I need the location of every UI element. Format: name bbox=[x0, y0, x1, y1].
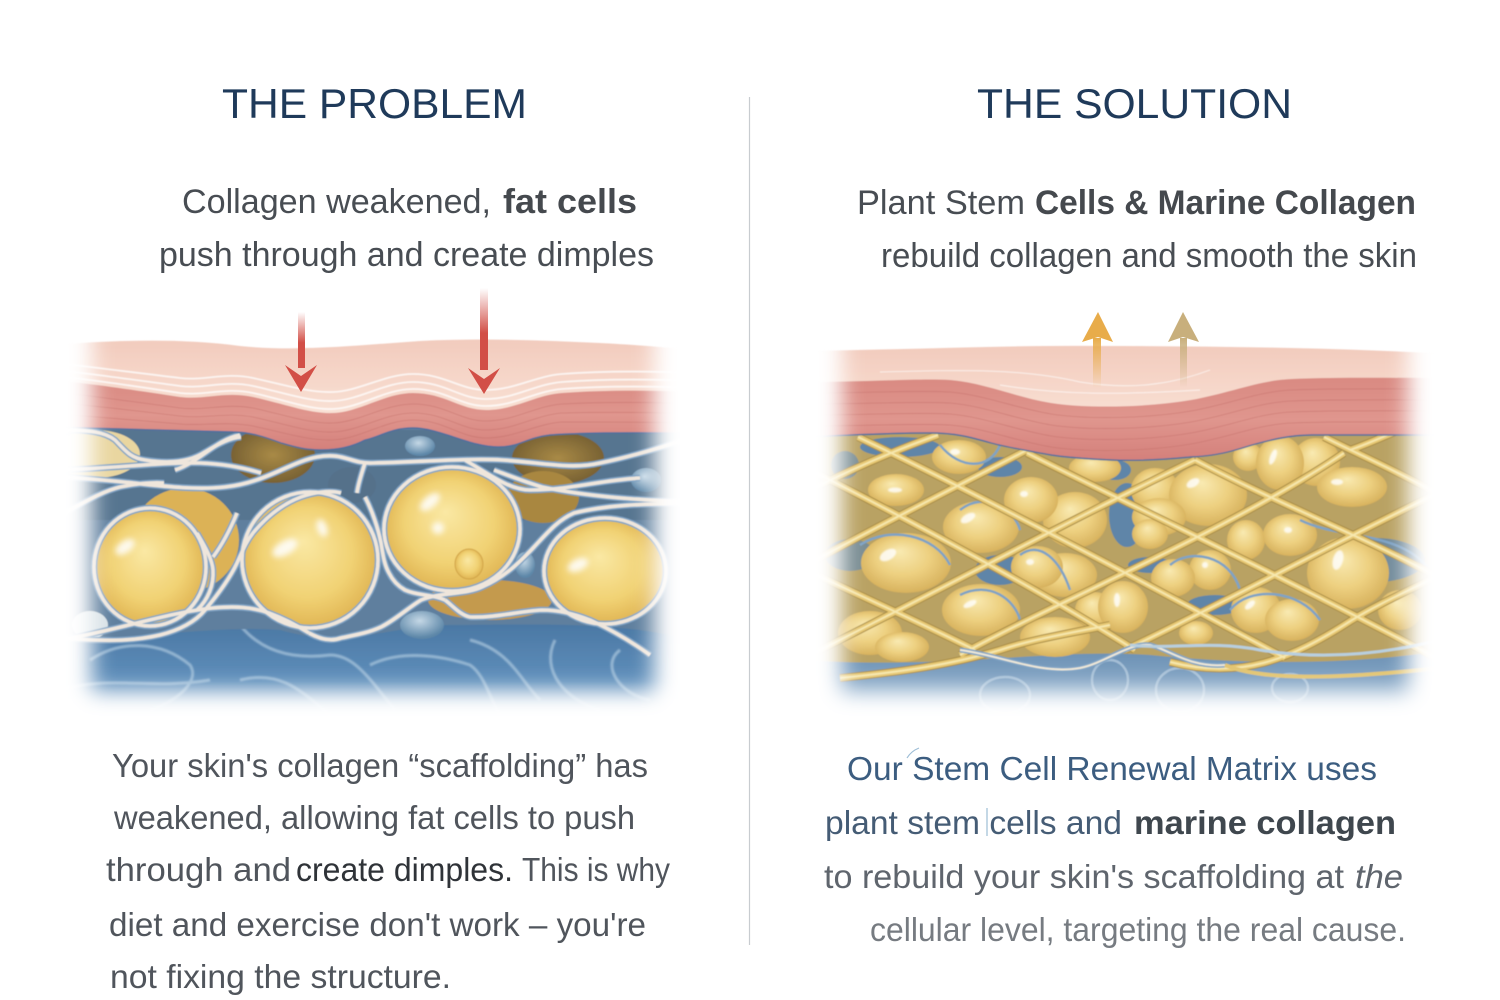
body text: problem bbox=[106, 747, 670, 995]
fat cell highlights bbox=[113, 490, 591, 575]
subheading: solution bbox=[857, 184, 1417, 275]
body text: problem: This is why bbox=[522, 851, 670, 888]
subheading: solution: Cells & Marine Collagen bbox=[1035, 184, 1416, 222]
connective tissue ripples bbox=[84, 628, 641, 698]
skin: dermis bbox=[800, 378, 1450, 460]
background fat cells bbox=[52, 427, 661, 639]
skin: dermis striations bbox=[852, 388, 1402, 440]
body text: problem: create dimples. bbox=[296, 851, 513, 888]
divider bbox=[748, 97, 750, 945]
body text: problem: not fixing the structure. bbox=[110, 958, 451, 995]
subheading: solution: rebuild collagen and smooth the skin bbox=[881, 237, 1417, 275]
body text: problem: diet and exercise don't work – you're bbox=[109, 906, 646, 943]
subheading: problem bbox=[159, 183, 654, 274]
lower wavy fibres bbox=[960, 640, 1440, 677]
body text: problem: weakened, allowing fat cells to push bbox=[113, 799, 635, 836]
fibre network bbox=[60, 430, 690, 655]
fat cell 1 bbox=[95, 509, 205, 625]
dermis boundary bbox=[800, 433, 1450, 460]
text artifact ticks bbox=[907, 748, 987, 836]
heading: the solution: THE SOLUTION bbox=[977, 80, 1292, 127]
fat cell 4 bbox=[545, 519, 665, 623]
skin: epidermis wave lines bbox=[84, 366, 662, 410]
connective tissue swirls bbox=[979, 658, 1310, 698]
fat cell 2 bbox=[243, 493, 377, 627]
body text: solution: plant stem cells and bbox=[825, 804, 1122, 841]
skin: upper epidermis bbox=[80, 339, 666, 414]
arrow: lift two bbox=[1168, 312, 1199, 388]
body text: solution: cellular level, targeting the real cause. bbox=[870, 911, 1406, 948]
fat bed bbox=[800, 430, 1450, 663]
dermis boundary bbox=[50, 427, 700, 450]
blue gaps bbox=[825, 437, 1425, 615]
arrow: lift one bbox=[1082, 312, 1113, 388]
body text: solution bbox=[824, 750, 1406, 948]
body text: solution: to rebuild your skin's scaffolding at bbox=[824, 858, 1344, 895]
arrow: pressure one bbox=[285, 312, 317, 392]
gold collagen lattice bbox=[810, 432, 1440, 678]
body text: solution: Our Stem Cell Renewal Matrix uses bbox=[847, 750, 1377, 787]
body text: problem: through and bbox=[106, 851, 291, 888]
subheading: solution: Plant Stem bbox=[857, 184, 1025, 222]
illustration: weakened skin cross-section bbox=[75, 339, 671, 707]
skin: epidermis bbox=[830, 345, 1420, 407]
illustration: rebuilt skin cross-section bbox=[825, 345, 1425, 706]
fat cell highlights bbox=[878, 448, 1345, 611]
arrow: pressure two bbox=[468, 288, 500, 394]
skin: dermis striations bbox=[101, 398, 646, 438]
dark interstitial layer bbox=[60, 425, 690, 640]
fat cell 3 bbox=[385, 468, 519, 590]
blue membranes bbox=[860, 445, 1430, 620]
subheading: problem: Collagen weakened, bbox=[182, 183, 491, 221]
small fat droplet bbox=[455, 549, 483, 579]
blue deep tissue bbox=[826, 652, 1424, 706]
body text: problem: Your skin's collagen “scaffolding” has bbox=[112, 747, 648, 784]
body text: solution: the bbox=[1355, 858, 1403, 895]
subheading: problem: fat cells bbox=[503, 183, 637, 221]
skin: dermis bbox=[77, 384, 670, 450]
heading: the problem: THE PROBLEM bbox=[222, 80, 527, 127]
fat cells bbox=[838, 436, 1422, 662]
blue deep tissue bbox=[75, 624, 671, 707]
subheading: problem: push through and create dimples bbox=[159, 236, 654, 274]
body text: solution: marine collagen bbox=[1134, 804, 1396, 841]
skin: epidermis texture bbox=[880, 370, 1210, 393]
